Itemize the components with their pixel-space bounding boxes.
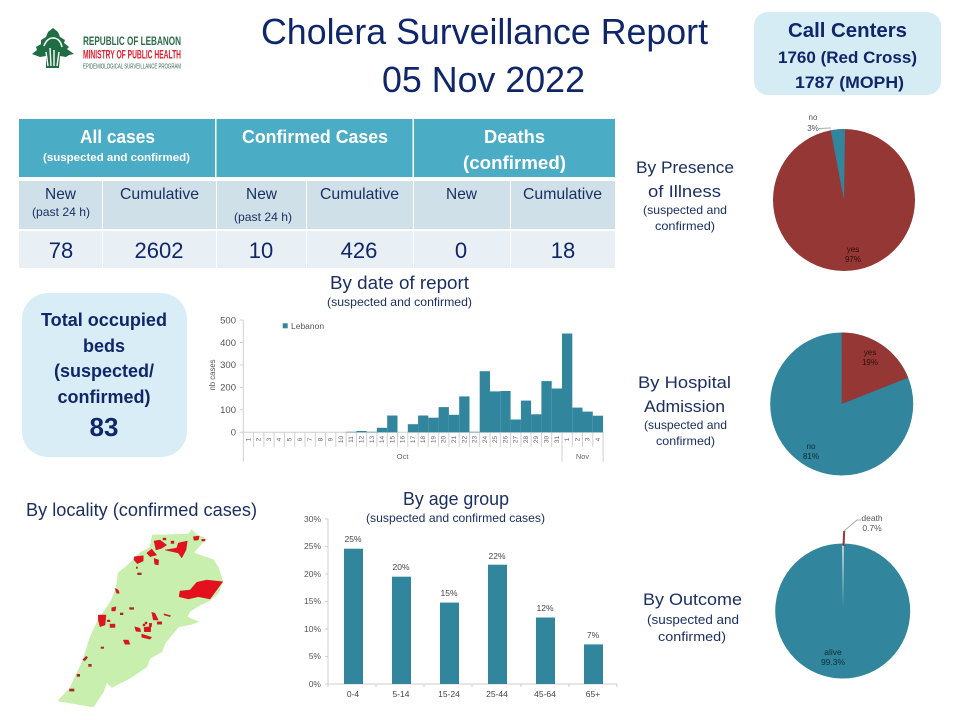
pie chart: hospital admission: no — [807, 442, 816, 451]
age bar value labels: 15% — [440, 588, 458, 598]
x axis day labels: 17 — [410, 436, 417, 443]
x axis day labels — [245, 436, 602, 443]
age y axis labels: 10% — [304, 624, 321, 634]
label: by presence of illness: confirmed) — [655, 219, 715, 233]
table sub-header row: Cumulative — [120, 186, 199, 203]
x axis day labels: 16 — [400, 436, 407, 443]
age y axis labels: 0% — [309, 679, 321, 689]
x axis day labels: 10 — [338, 436, 345, 443]
bar chart: cases by age group — [304, 514, 617, 699]
callout: call centers: 1760 (Red Cross) — [778, 48, 917, 67]
table header row — [19, 119, 615, 177]
label: by outcome: By Outcome — [643, 590, 742, 609]
x axis day labels: 27 — [513, 436, 520, 443]
x axis day labels: 2 — [574, 437, 581, 441]
table values row: 426 — [341, 238, 377, 263]
table values row: 18 — [551, 238, 575, 263]
x axis day labels: 2 — [256, 437, 263, 441]
age x axis labels: 0-4 — [347, 689, 359, 699]
x axis day labels: 24 — [482, 436, 489, 443]
label: by hospital admission: Admission — [644, 397, 725, 416]
pie chart: outcome: alive — [824, 647, 842, 657]
pie chart: presence of illness: 97% — [845, 255, 861, 264]
label: by outcome — [643, 590, 742, 644]
age bar value labels — [344, 534, 600, 640]
table sub-header row: New — [246, 186, 277, 203]
x axis day labels: 1 — [564, 437, 571, 441]
callout: call centers — [754, 12, 941, 95]
callout: total occupied beds: 83 — [90, 412, 118, 442]
age y axis labels: 15% — [304, 596, 321, 606]
label: by presence of illness: By Presence — [636, 158, 734, 177]
x axis day labels: 15 — [389, 436, 396, 443]
age bar value labels: 7% — [587, 630, 600, 640]
callout: total occupied beds: confirmed) — [57, 387, 151, 407]
x axis day labels: 4 — [595, 437, 602, 441]
logo text: program: EPIDEMIOLOGICAL SURVEILLANCE PROGRAM — [83, 64, 181, 70]
age y axis labels — [304, 514, 321, 689]
heading: by locality: By locality (confirmed cases) — [26, 500, 257, 520]
logo: Ministry of Public Health — [32, 28, 181, 70]
y axis title: nb cases — [207, 360, 217, 390]
bar chart: cases by date of report — [207, 315, 603, 462]
x axis day labels: 25 — [492, 436, 499, 443]
pie chart: hospital admission: 19% — [862, 358, 878, 367]
x axis day labels: 3 — [585, 437, 592, 441]
x axis day labels: 21 — [451, 436, 458, 443]
heading: by age group: (suspected and confirmed cases) — [366, 511, 545, 525]
table values row: 0 — [455, 238, 467, 263]
x axis day labels: 29 — [533, 436, 540, 443]
pie chart: outcome — [775, 513, 910, 678]
table values row — [19, 231, 615, 268]
x axis day labels: 11 — [348, 436, 355, 443]
x axis day labels: 8 — [317, 437, 324, 441]
label: by outcome: (suspected and — [647, 612, 739, 627]
callout: call centers: 1787 (MOPH) — [795, 73, 904, 92]
age x axis labels — [347, 689, 600, 699]
table sub-header row: (past 24 h) — [32, 205, 90, 219]
x axis day labels: 19 — [430, 436, 437, 443]
x axis day labels: 4 — [276, 437, 283, 441]
callout: call centers: Call Centers — [788, 20, 907, 42]
y axis labels — [220, 315, 236, 439]
callout: total occupied beds: Total occupied — [41, 310, 167, 330]
chart bars — [346, 334, 603, 432]
label: by presence of illness: (suspected and — [643, 203, 727, 217]
table header row: (suspected and confirmed) — [43, 152, 190, 164]
heading: by date of report — [327, 273, 472, 309]
panel: case summary table — [19, 119, 615, 268]
x axis month labels: Oct — [397, 452, 409, 461]
pie chart: presence of illness: no — [809, 113, 818, 122]
pie chart: hospital admission: 81% — [803, 452, 819, 461]
age y axis labels: 5% — [309, 651, 321, 661]
table header row: (confirmed) — [463, 153, 566, 173]
x axis day labels: 22 — [461, 436, 468, 443]
logo text: Republic of Lebanon: REPUBLIC OF LEBANON — [83, 34, 181, 48]
age bars — [344, 549, 603, 684]
label: by presence of illness — [636, 158, 734, 233]
pie chart: outcome: death — [861, 513, 883, 523]
table header row: Deaths — [484, 127, 545, 147]
heading: by date of report: By date of report — [330, 273, 469, 293]
age x axis labels: 5-14 — [392, 689, 410, 699]
x axis day labels: 14 — [379, 436, 386, 443]
age x axis labels: 15-24 — [438, 689, 460, 699]
table sub-header row — [19, 181, 615, 229]
pie chart: presence of illness: 3% — [807, 124, 819, 133]
title: Cholera Surveillance Report — [261, 11, 708, 52]
x axis day labels: 6 — [297, 437, 304, 441]
label: by hospital admission: (suspected and — [644, 418, 727, 432]
title: 05 Nov 2022 — [382, 59, 585, 100]
y axis labels: 100 — [220, 405, 236, 416]
age y axis labels: 20% — [304, 569, 321, 579]
age x axis labels: 65+ — [586, 689, 600, 699]
pie chart: hospital admission: yes — [864, 348, 876, 357]
table sub-header row: Cumulative — [320, 186, 399, 203]
callout: total occupied beds: (suspected/ — [54, 361, 154, 381]
label: by hospital admission: By Hospital — [638, 373, 731, 392]
table sub-header row: (past 24 h) — [234, 210, 292, 224]
age bar value labels: 12% — [536, 603, 554, 613]
table header row: All cases — [80, 127, 155, 147]
icon: cedar tree — [32, 28, 74, 68]
x axis day labels: 20 — [441, 436, 448, 443]
x axis day labels: 3 — [266, 437, 273, 441]
pie chart: presence of illness: yes — [847, 245, 859, 254]
x axis day labels: 7 — [307, 437, 314, 441]
legend: Lebanon — [291, 321, 324, 331]
pie chart: hospital admission — [770, 332, 913, 476]
age x axis labels: 45-64 — [534, 689, 556, 699]
pie chart: presence of illness — [773, 113, 915, 271]
table values row: 10 — [249, 238, 273, 263]
age bar value labels: 20% — [392, 562, 410, 572]
x axis day labels: 23 — [472, 436, 479, 443]
x axis day labels: 12 — [358, 436, 366, 443]
age bar value labels: 22% — [488, 551, 506, 561]
age y axis labels: 30% — [304, 514, 321, 524]
pie chart: outcome: 99.3% — [821, 657, 845, 667]
x axis day labels: 26 — [502, 436, 509, 443]
x axis day labels: 28 — [523, 436, 530, 443]
label: by hospital admission: confirmed) — [656, 434, 715, 448]
label: by outcome: confirmed) — [658, 629, 726, 644]
x axis month labels — [397, 452, 589, 461]
map: Lebanon localities with confirmed cases — [58, 530, 223, 707]
table values row: 78 — [49, 238, 73, 263]
age x axis labels: 25-44 — [486, 689, 508, 699]
x axis day labels: 1 — [245, 437, 252, 441]
callout: total occupied beds — [22, 293, 187, 457]
pie chart: outcome: 0.7% — [862, 523, 882, 533]
x axis month labels: Nov — [576, 452, 589, 461]
label: by presence of illness: of Illness — [648, 182, 721, 201]
title — [261, 11, 708, 100]
heading: by date of report: (suspected and confirmed) — [327, 295, 472, 309]
x axis day labels: 18 — [420, 436, 427, 443]
logo text: Ministry of Public Health: MINISTRY OF PUBLIC HEALTH — [83, 50, 181, 62]
heading: by age group: By age group — [403, 489, 509, 509]
callout: total occupied beds: beds — [83, 336, 125, 356]
y axis labels: 0 — [231, 428, 236, 439]
age bar value labels: 25% — [344, 534, 362, 544]
table sub-header row: New — [446, 186, 477, 203]
x axis day labels: 31 — [554, 436, 561, 443]
table sub-header row: New — [45, 186, 76, 203]
label: by hospital admission — [638, 373, 731, 448]
y axis labels: 300 — [220, 360, 236, 371]
y axis labels: 200 — [220, 383, 236, 394]
heading: by age group — [366, 489, 545, 525]
x axis day labels: 30 — [544, 436, 550, 443]
x axis day labels: 13 — [369, 436, 376, 443]
table header row: Confirmed Cases — [242, 127, 388, 147]
age y axis labels: 25% — [304, 541, 321, 551]
table values row: 2602 — [135, 238, 183, 263]
y axis labels: 500 — [220, 315, 236, 326]
x axis day labels: 9 — [328, 437, 335, 441]
table sub-header row: Cumulative — [523, 186, 602, 203]
x axis day labels: 5 — [286, 437, 294, 441]
y axis labels: 400 — [220, 338, 236, 349]
